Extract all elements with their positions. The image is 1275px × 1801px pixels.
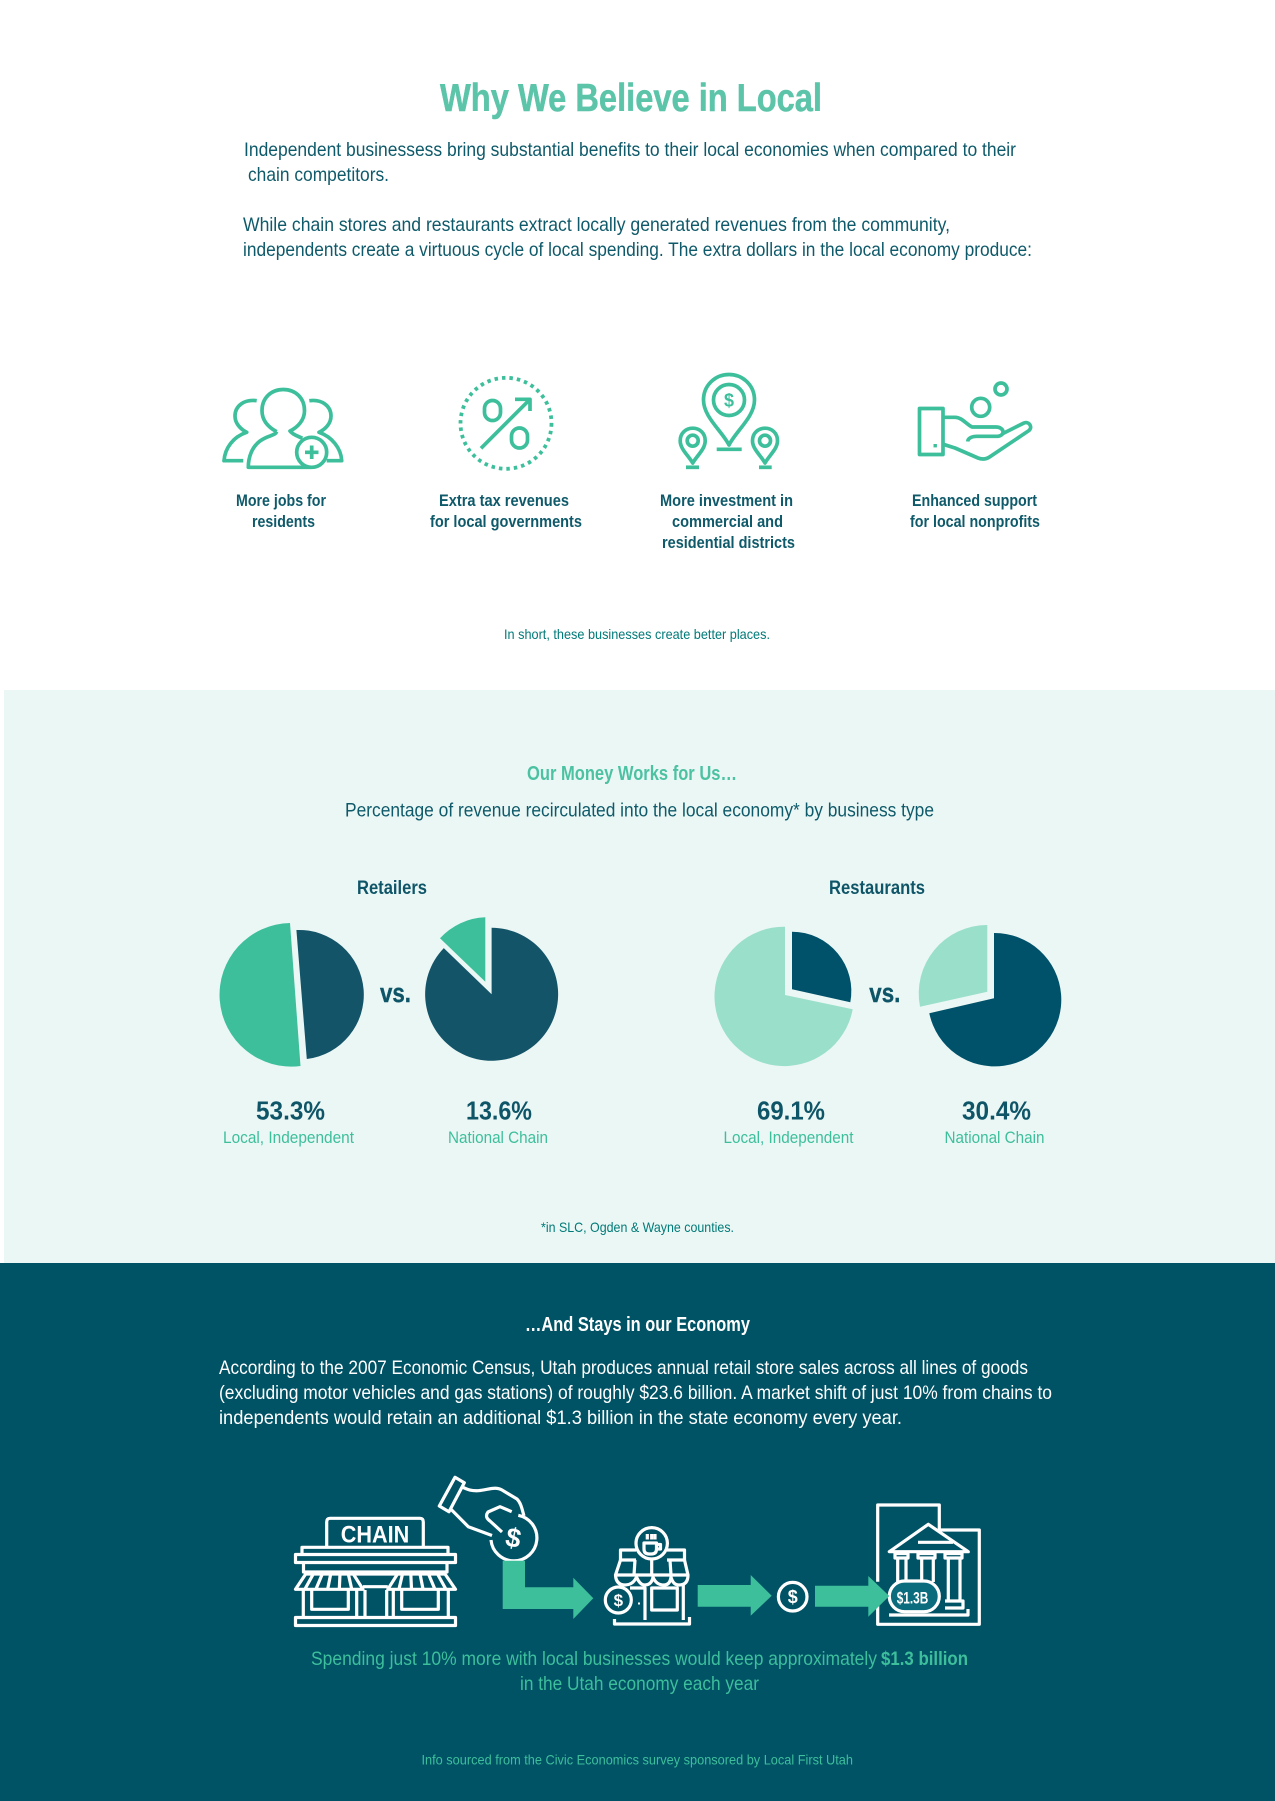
arrow: shop to dollar: [698, 1575, 772, 1616]
stat: retailers local: 53.3%: [256, 1098, 325, 1126]
intro paragraph two: [243, 214, 1032, 261]
icon: hand dropping coin: $: [503, 1522, 524, 1554]
stat: restaurants chain: [944, 1098, 1044, 1147]
callout: spending summary: Spending just 10% more with local businesses would keep approximately: [311, 1648, 877, 1670]
icon: chain store: [296, 1518, 456, 1626]
versus label: vs.: [869, 978, 900, 1008]
pie: restaurants local independent: [715, 927, 853, 1066]
icon: local coffee shop: $: [614, 1591, 624, 1610]
intro paragraph one: Independent businessess bring substantial benefits to their local economies when compared to their: [244, 139, 1016, 161]
intro paragraph one: [244, 139, 1016, 186]
benefit labels: Enhanced support: [912, 492, 1037, 510]
benefit labels: commercial and: [672, 513, 783, 531]
intro paragraph two: independents create a virtuous cycle of local spending. The extra dollars in the local economy produce:: [243, 239, 1032, 261]
restaurants heading: Restaurants: [829, 878, 925, 899]
stat: restaurants local: [724, 1098, 854, 1147]
retailers heading: Retailers: [357, 878, 427, 899]
stat: restaurants chain: National Chain: [944, 1128, 1044, 1147]
icon: chain store: CHAIN: [341, 1522, 409, 1549]
pie: restaurants national chain: [919, 925, 1061, 1066]
source note: Info sourced from the Civic Economics survey sponsored by Local First Utah: [422, 1752, 853, 1768]
arrow: chain to local: [503, 1561, 593, 1619]
economic census paragraph: According to the 2007 Economic Census, Utah produces annual retail store sales across all lines of goods: [219, 1357, 1028, 1379]
benefit labels: for local nonprofits: [910, 513, 1040, 531]
stat: retailers chain: 13.6%: [466, 1098, 532, 1126]
icon: bank with 1.3B: $1.3B: [897, 1588, 928, 1607]
closing note: In short, these businesses create better places.: [504, 626, 770, 642]
panel: stays in our economy: [0, 1263, 1275, 1801]
panel: why local intro: [243, 77, 1032, 261]
stat: restaurants local: Local, Independent: [724, 1128, 854, 1147]
benefit labels: [236, 492, 1040, 552]
callout: spending summary: [311, 1648, 968, 1695]
icon: bank with 1.3B: [878, 1505, 979, 1624]
benefit labels: More investment in: [660, 492, 793, 510]
pie: retailers national chain: [425, 917, 558, 1061]
economic census paragraph: independents would retain an additional $1.3 billion in the state economy every year.: [219, 1407, 902, 1429]
icon: location pins with dollar: $: [724, 390, 734, 410]
section heading: Our Money Works for Us…: [527, 763, 737, 785]
arrow: dollar to bank: [815, 1576, 889, 1617]
benefit labels: for local governments: [430, 513, 582, 531]
callout: spending summary: in the Utah economy each year: [520, 1673, 759, 1695]
callout: spending summary: $1.3 billion: [881, 1648, 968, 1670]
icon: people with plus: [224, 390, 342, 467]
icon: dollar coin: [778, 1582, 807, 1611]
icon: hand dropping coin: [439, 1477, 537, 1561]
intro paragraph two: While chain stores and restaurants extract locally generated revenues from the community,: [243, 214, 950, 236]
intro paragraph one: chain competitors.: [248, 164, 389, 186]
stat: restaurants local: 69.1%: [757, 1098, 825, 1126]
icon: dollar coin: $: [788, 1587, 798, 1607]
panel: money recirculation: [4, 690, 1275, 1263]
icon: location pins with dollar: [680, 374, 778, 467]
pie: retailers local independent: [220, 923, 364, 1067]
benefit labels: residents: [252, 513, 315, 531]
title: Why We Believe in Local: [440, 77, 822, 120]
stat: retailers local: [223, 1098, 354, 1147]
economic census paragraph: [219, 1357, 1052, 1429]
section heading: …And Stays in our Economy: [525, 1314, 751, 1336]
versus label: vs.: [380, 978, 411, 1008]
stat: retailers local: Local, Independent: [223, 1128, 354, 1147]
icon: local coffee shop: [605, 1528, 690, 1624]
stat: restaurants chain: 30.4%: [962, 1098, 1031, 1126]
economic census paragraph: (excluding motor vehicles and gas stations) of roughly $23.6 billion. A market shift of just 10% from chains to: [219, 1382, 1052, 1404]
icon: percent with arrow in dotted circle: [460, 378, 552, 469]
footnote: *in SLC, Ogden & Wayne counties.: [541, 1219, 734, 1235]
benefit labels: Extra tax revenues: [439, 492, 569, 510]
stat: retailers chain: [448, 1098, 548, 1147]
stat: retailers chain: National Chain: [448, 1128, 548, 1147]
section subtitle: Percentage of revenue recirculated into the local economy* by business type: [345, 800, 934, 822]
benefit labels: residential districts: [662, 534, 795, 552]
benefit labels: More jobs for: [236, 492, 326, 510]
icon: open hand with coins: [920, 383, 1031, 459]
